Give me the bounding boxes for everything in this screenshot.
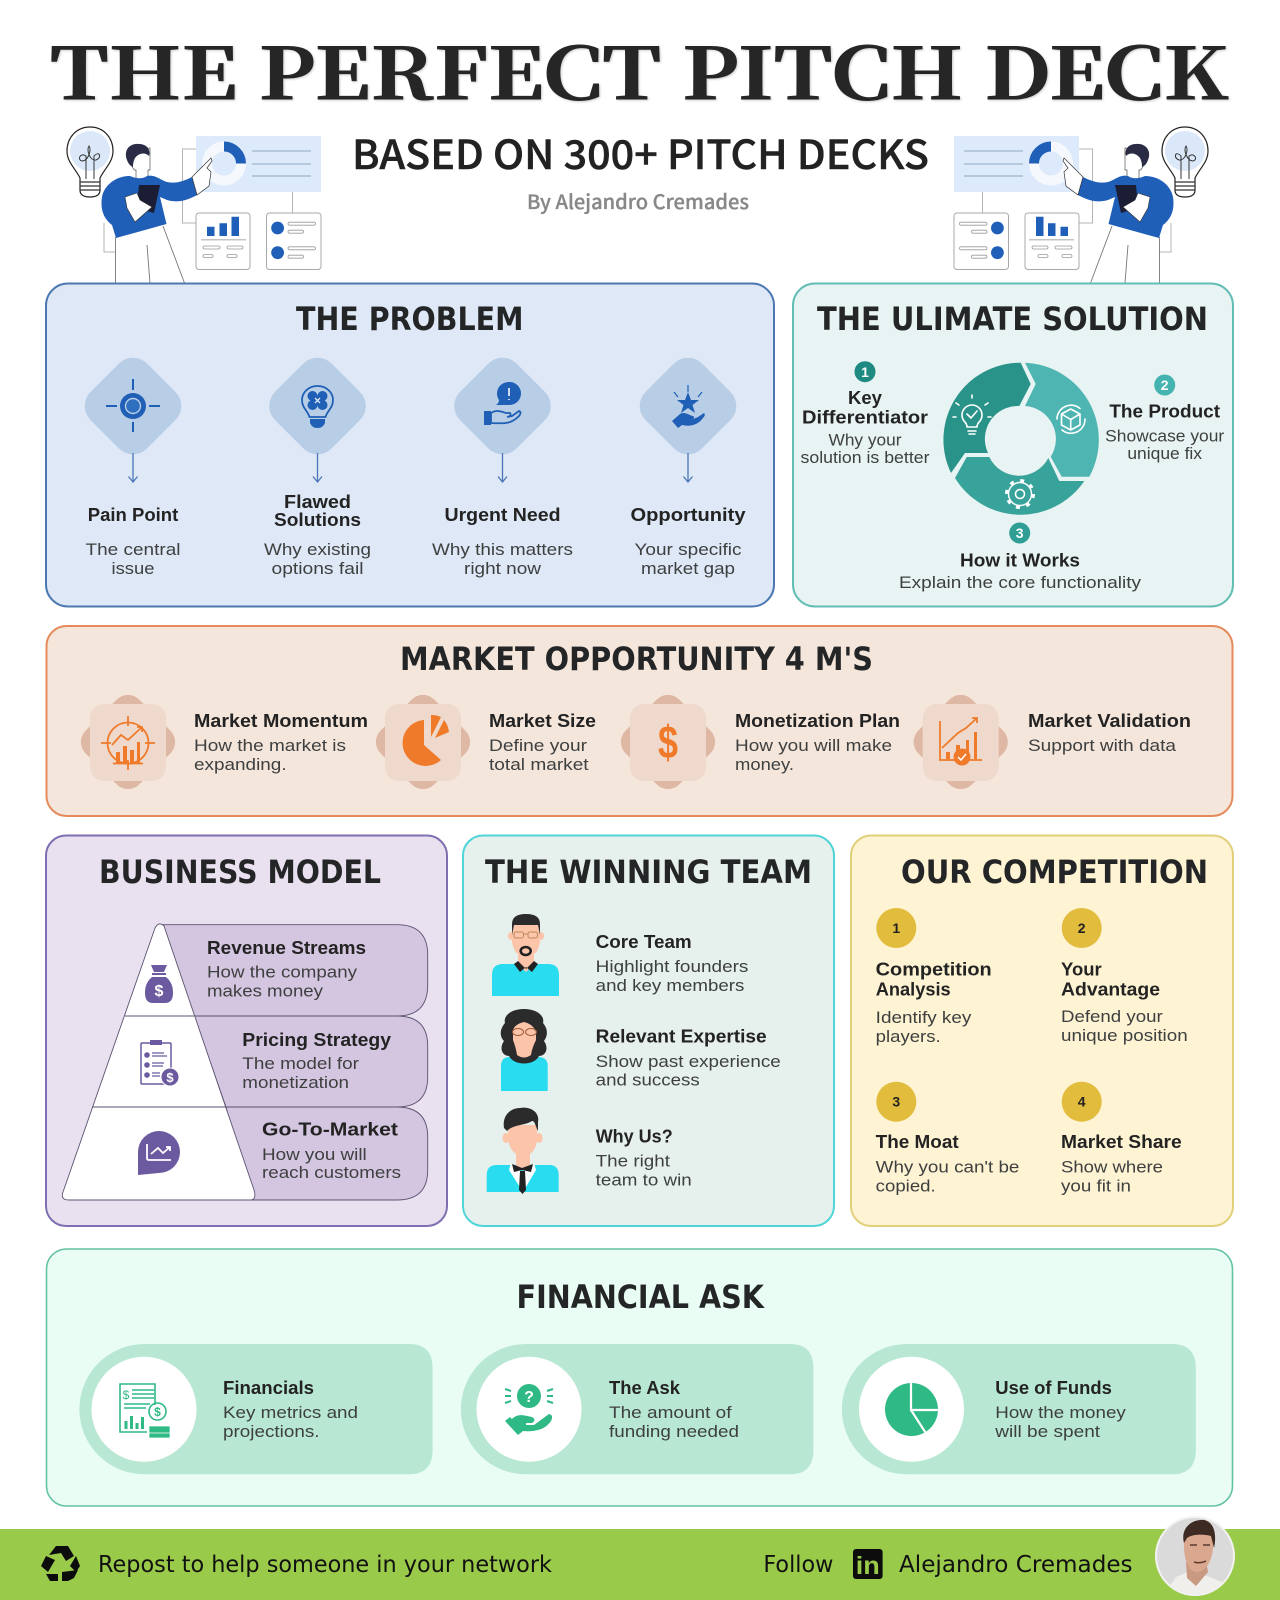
panel: market opportunity [46,626,1232,816]
icon: dollar on bag: $ [155,983,164,1000]
arrow [313,453,322,482]
item: the moat: Why you can't be [876,1158,1019,1177]
item: your advantage: unique position [1061,1026,1188,1045]
item: market size: Define your [489,736,587,755]
text: go-to-market: reach customers [262,1163,401,1182]
label: key differentiator: 1 [861,364,869,380]
bar chart card [196,213,250,270]
label: the product: 2 [1161,377,1169,393]
text: why us: team to win [596,1171,692,1190]
label: key differentiator [800,361,930,467]
icon: financial report [120,1384,170,1438]
white pyramid [62,924,255,1200]
item: use of funds [842,1344,1196,1474]
item: the moat: The Moat [876,1131,959,1152]
dashboard panel [196,136,321,192]
heading: OUR COMPETITION [901,853,1208,891]
item: market size [369,688,596,796]
icon: gear [1006,480,1034,508]
item: competition analysis: Competition [876,958,992,979]
heading: MARKET OPPORTUNITY 4 M'S [400,640,873,678]
lightbulb [67,127,113,197]
item: the ask: The amount of [609,1403,732,1422]
item: the moat: 3 [892,1094,900,1110]
icon: hand with question [505,1384,553,1435]
tier: pricing strategy [194,1016,428,1107]
pyramid diagram [62,924,428,1200]
subtitle: BASED ON 300+ PITCH DECKS [352,123,929,181]
follow text: Follow [763,1552,833,1578]
item: urgent need [432,349,573,578]
item: urgent need: Why this matters [432,540,573,559]
label: key differentiator: Differentiator [802,407,928,428]
item: opportunity: Your specific [634,540,742,559]
connectors [104,149,292,252]
item: flawed solutions: Flawed [284,491,351,512]
left header illustration: presenter with dashboards [67,127,321,283]
text: pricing strategy: monetization [242,1073,349,1092]
label: how it works: 3 [1016,525,1024,541]
item: market share: you fit in [1061,1177,1131,1196]
item: market validation: Support with data [1028,736,1177,755]
panel: the winning team [463,836,834,1226]
item: competition analysis [876,908,992,1046]
item: market share: 4 [1078,1094,1086,1110]
text: relevant expertise: Show past experience [596,1052,781,1071]
icon: bulb check [953,395,991,434]
item: monetization plan: How you will make [735,736,892,755]
icon: pie chart [885,1381,940,1438]
icon: hand with question: ? [524,1389,534,1406]
item: pain point: issue [112,559,154,578]
icon: star in hand [672,385,705,428]
item: market validation [907,688,1191,796]
avatar: man with tie [487,1108,559,1194]
panel: the ultimate solution [793,284,1233,606]
icon: clipboard: $ [166,1070,174,1085]
item: competition analysis: players. [876,1027,941,1046]
icon: hand and alert [484,382,521,425]
icon: money bag [145,965,173,1003]
author name: Alejandro Cremades [899,1552,1133,1578]
item: flawed solutions: options fail [272,559,364,578]
label: how it works: How it Works [960,550,1080,571]
icon: flawed bulb [302,386,333,428]
panel: financial ask [46,1249,1232,1506]
item: financials: Financials [223,1377,314,1398]
repost text: Repost to help someone in your network [98,1552,553,1578]
icon text: dollar signs [123,1388,161,1419]
item: flawed solutions: Solutions [274,509,361,530]
icon text: dollar signs: $ [123,1388,130,1402]
arrow [128,453,138,482]
label: the product [1105,374,1225,463]
item: monetization plan [614,688,900,796]
item: the ask [461,1344,813,1474]
item: use of funds: will be spent [994,1422,1100,1441]
item: your advantage: Advantage [1061,979,1160,1000]
item: the moat: copied. [876,1177,936,1196]
label: key differentiator: solution is better [800,448,930,467]
heading: THE ULIMATE SOLUTION [817,300,1208,338]
item: the ask: The Ask [609,1377,681,1398]
item: market size: Market Size [489,710,596,731]
item: market share [1061,1082,1182,1196]
text: revenue streams: makes money [207,982,324,1001]
icon: linkedin [853,1549,883,1580]
item: flawed solutions: Why existing [264,540,371,559]
text: core team: Highlight founders [596,957,748,976]
item: market momentum [74,688,368,796]
avatar: woman with glasses [501,1009,548,1091]
text: go-to-market: Go-To-Market [262,1119,398,1140]
text: pricing strategy [242,1029,392,1092]
item: urgent need: Urgent Need [444,504,560,525]
icon text: dollar signs: $ [154,1405,161,1419]
item: use of funds: Use of Funds [995,1377,1112,1398]
label: how it works: Explain the core functionality [899,573,1142,592]
item: market share: Show where [1061,1158,1163,1177]
label: key differentiator: Why your [828,431,902,450]
footer bar [0,1510,1280,1600]
text: revenue streams [207,937,366,1001]
author photo [1155,1516,1235,1596]
item: pain point [76,349,190,578]
item: market momentum: Market Momentum [194,710,368,731]
avatar: bearded man with glasses [492,914,559,996]
item: financials: Key metrics and [223,1403,358,1422]
label: how it works [899,522,1142,592]
item: urgent need: right now [464,559,542,578]
text: core team: Core Team [596,931,692,952]
item: use of funds: How the money [995,1403,1126,1422]
item: monetization plan: money. [735,755,794,774]
item: the moat [876,1082,1019,1196]
icon: chart check [940,718,982,766]
item: market momentum: How the market is [194,736,346,755]
text: why us: The right [596,1152,670,1171]
item: pain point: The central [86,540,180,559]
item: monetization plan: Monetization Plan [735,710,900,731]
text: revenue streams: How the company [207,963,358,982]
icon: recycle [41,1546,80,1581]
item: flawed solutions [261,349,374,578]
item: market momentum: expanding. [194,755,287,774]
item: opportunity [630,349,746,578]
tier: revenue streams [160,925,428,1016]
text: relevant expertise [596,1026,781,1090]
byline: By Alejandro Cremades [527,186,749,215]
list card [266,213,321,270]
heading: THE WINNING TEAM [485,853,812,891]
text: go-to-market [262,1119,401,1182]
text: core team [596,931,748,995]
item: market validation: Market Validation [1028,710,1191,731]
panel: the problem [46,284,774,606]
text: pricing strategy: Pricing Strategy [242,1029,392,1050]
arrow [684,453,692,482]
label: the product: Showcase your [1105,427,1225,446]
label: key differentiator: Key [848,387,883,408]
item: your advantage: Your [1061,958,1102,979]
icon: linkedin: in [856,1552,880,1580]
item: your advantage: 2 [1078,920,1086,936]
label: the product: The Product [1109,401,1220,422]
icon: target chart [101,716,155,770]
item: market size: total market [489,755,589,774]
arrow [498,453,507,482]
text: why us: Why Us? [596,1126,673,1147]
icon: chat chart [138,1131,180,1175]
cycle diagram [943,363,1099,515]
panel: our competition [851,836,1233,1226]
right header illustration: mirrored presenter [954,127,1208,283]
icon: pie chart [403,715,449,766]
item: financials: projections. [223,1422,320,1441]
tier: go-to-market [226,1107,428,1200]
heading: BUSINESS MODEL [99,853,381,891]
icon: crosshair [106,379,160,432]
label: the product: unique fix [1127,444,1203,463]
item: pain point: Pain Point [88,504,178,525]
panel: business model [46,836,447,1226]
item: competition analysis: Identify key [876,1008,972,1027]
heading: THE PROBLEM [296,300,524,338]
text: revenue streams: Revenue Streams [207,937,366,958]
item: opportunity: Opportunity [630,504,746,525]
item: competition analysis: 1 [892,920,900,936]
icon: clipboard [141,1040,179,1086]
item: market share: Market Share [1061,1131,1182,1152]
item: your advantage [1061,908,1188,1045]
text: why us [596,1126,692,1190]
item: the ask: funding needed [609,1422,739,1441]
item: competition analysis: Analysis [876,979,951,1000]
text: relevant expertise: Relevant Expertise [596,1026,767,1047]
presenter [101,144,212,283]
title: THE PERFECT PITCH DECK [50,18,1229,120]
text: core team: and key members [596,976,744,995]
item: your advantage: Defend your [1061,1007,1163,1026]
icon: dollar: $ [658,716,678,768]
text: relevant expertise: and success [596,1071,700,1090]
text: pricing strategy: The model for [242,1054,359,1073]
item: opportunity: market gap [641,559,735,578]
item: financials [79,1344,433,1474]
heading: FINANCIAL ASK [516,1278,765,1316]
text: go-to-market: How you will [262,1145,367,1164]
icon: cube [1057,405,1085,433]
